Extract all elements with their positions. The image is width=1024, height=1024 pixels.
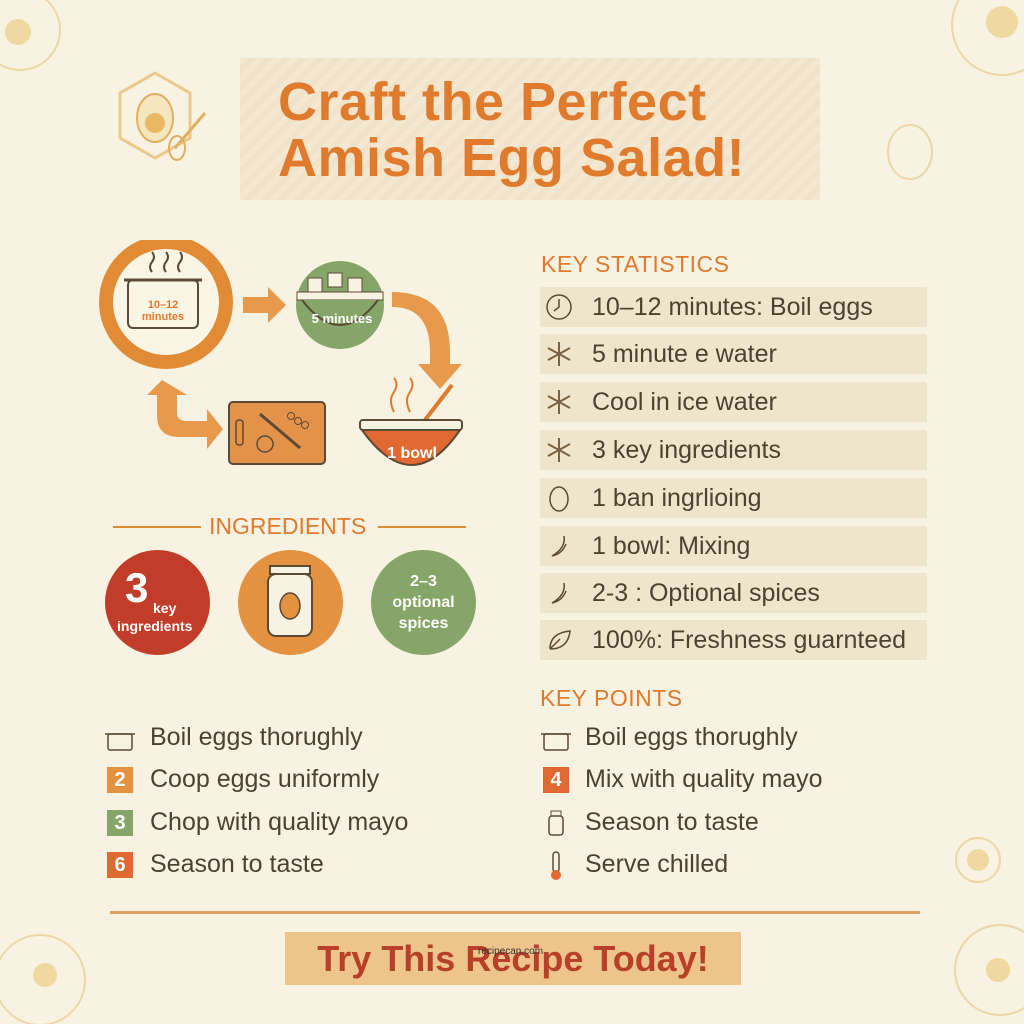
ingredient: 3 key ingredients: 3	[125, 564, 148, 611]
icon: egg and whisk logo	[118, 71, 206, 161]
ingredients heading: INGREDIENTS	[209, 513, 366, 539]
stat row 6: 1 bowl: Mixing	[592, 532, 750, 560]
process diagram	[99, 240, 463, 466]
stat row 7	[540, 573, 927, 613]
right key points list: Mix with quality mayo	[585, 765, 823, 793]
step: boil pot: 10–12	[148, 299, 178, 311]
ingredient: optional spices	[371, 550, 476, 655]
arrow right	[243, 287, 286, 323]
stat row 8: 100%: Freshness guarnteed	[592, 626, 906, 654]
divider	[110, 911, 920, 914]
right key points list: 4	[550, 769, 562, 791]
stat row 5	[540, 478, 927, 518]
left steps list: 6	[114, 854, 126, 876]
left steps list: Chop with quality mayo	[150, 808, 408, 836]
left steps list: Boil eggs thorughly	[150, 723, 363, 751]
arrow curved up	[147, 380, 223, 449]
stat row 4	[540, 430, 927, 470]
step: cutting board	[229, 402, 325, 464]
stat row 1: 10–12 minutes: Boil eggs	[592, 293, 873, 321]
ingredient: 3 key ingredients: ingredients	[117, 618, 192, 634]
stat row 5: 1 ban ingrlioing	[592, 484, 762, 512]
ingredient: 3 key ingredients	[105, 550, 210, 655]
title	[240, 58, 820, 200]
title: Amish Egg Salad!	[278, 128, 745, 188]
watermark: recipecan.com	[478, 946, 543, 957]
left steps list: Season to taste	[150, 850, 324, 878]
ingredient: optional spices: spices	[399, 615, 448, 632]
ingredient: optional spices: 2–3	[410, 573, 437, 590]
call to action button: Try This Recipe Today!	[317, 938, 709, 979]
step: boil pot	[106, 242, 226, 362]
decorative bottom eggs	[0, 934, 86, 1024]
right key points list	[541, 723, 823, 880]
stat row 6	[540, 526, 927, 566]
key statistics heading: KEY STATISTICS	[541, 251, 729, 277]
key points heading: KEY POINTS	[540, 685, 683, 711]
left steps list: 3	[114, 812, 126, 834]
decorative egg outline right	[887, 124, 933, 180]
title: Craft the Perfect	[278, 72, 707, 132]
right key points list: Serve chilled	[585, 850, 728, 878]
decorative corner egg top-right	[951, 0, 1024, 76]
right key points list: Season to taste	[585, 808, 759, 836]
stat row 2	[540, 334, 927, 374]
arrow down curve	[392, 292, 462, 389]
left steps list: Coop eggs uniformly	[150, 765, 379, 793]
stat row 3: Cool in ice water	[592, 388, 777, 416]
step: mixing bowl	[360, 378, 462, 465]
statistics list	[540, 287, 927, 660]
decorative corner egg top-left	[0, 0, 61, 71]
left steps list	[105, 723, 408, 878]
ingredient: 3 key ingredients: key	[153, 600, 176, 616]
stat row 8	[540, 620, 927, 660]
stat row 1	[540, 287, 927, 327]
step: boil pot: minutes	[142, 311, 184, 323]
stat row 7: 2-3 : Optional spices	[592, 579, 820, 607]
stat row 3	[540, 382, 927, 422]
ingredient: mayo jar	[238, 550, 343, 655]
step: ice bowl: 5 minutes	[312, 311, 372, 326]
right key points list: Boil eggs thorughly	[585, 723, 798, 751]
step: mixing bowl: 1 bowl	[387, 445, 437, 462]
ingredient: optional spices: optional	[392, 594, 455, 611]
step: ice bowl	[296, 261, 384, 349]
stat row 4: 3 key ingredients	[592, 436, 781, 464]
stat row 2: 5 minute e water	[592, 340, 777, 368]
left steps list: 2	[114, 769, 126, 791]
call to action button	[285, 932, 741, 985]
